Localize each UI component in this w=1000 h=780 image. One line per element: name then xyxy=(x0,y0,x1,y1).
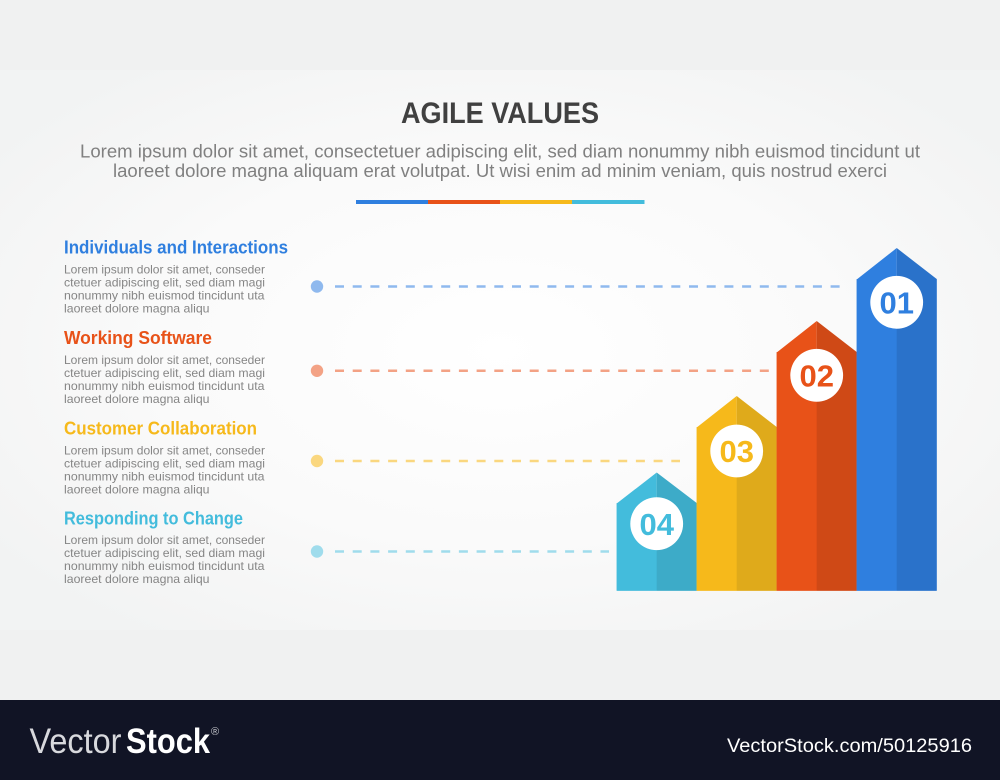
description: working software: Lorem ipsum dolor sit amet, conseder xyxy=(64,353,265,367)
connector: blue dot and dashed line xyxy=(311,280,840,293)
connector: orange dot and dashed line xyxy=(311,365,769,377)
footer bar xyxy=(0,700,1000,780)
description: individuals and interactions: ctetuer adipiscing elit, sed diam magi xyxy=(64,276,265,290)
description: working software xyxy=(64,353,265,406)
description: customer collaboration: ctetuer adipiscing elit, sed diam magi xyxy=(64,456,265,470)
title: AGILE VALUES xyxy=(401,97,599,130)
heading: working software: Working Software xyxy=(64,328,212,348)
description: responding to change: nonummy nibh euismod tincidunt uta xyxy=(64,559,265,573)
footer logo: Vector xyxy=(30,722,122,761)
connector: cyan dot and dashed line xyxy=(311,545,609,558)
arrow bar 04 xyxy=(617,472,697,591)
footer logo: ® xyxy=(211,726,219,738)
panel: individuals and interactions text xyxy=(64,238,288,316)
description: customer collaboration xyxy=(64,444,265,496)
description: customer collaboration: nonummy nibh euismod tincidunt uta xyxy=(64,470,265,484)
arrow bar 01: 01 xyxy=(879,285,914,320)
panel: working software text xyxy=(64,328,265,406)
footer image id: VectorStock.com/50125916 xyxy=(727,736,972,757)
panel: responding to change text xyxy=(64,508,265,586)
footer logo xyxy=(30,722,219,761)
description: working software: nonummy nibh euismod tincidunt uta xyxy=(64,379,265,393)
description: responding to change: Lorem ipsum dolor sit amet, conseder xyxy=(64,533,265,547)
subtitle text block: Lorem ipsum dolor sit amet, consectetuer adipiscing elit, sed diam nonummy nibh euismod tincidunt ut xyxy=(80,142,920,162)
connector: yellow dot and dashed line xyxy=(311,455,680,467)
description: working software: laoreet dolore magna aliqu xyxy=(64,392,210,406)
arrow bar 01 xyxy=(857,248,937,591)
heading: customer collaboration: Customer Collaboration xyxy=(64,418,257,438)
heading: individuals and interactions: Individuals and Interactions xyxy=(64,238,288,258)
description: responding to change: ctetuer adipiscing elit, sed diam magi xyxy=(64,546,265,560)
arrow bar 04: 04 xyxy=(639,507,675,542)
arrow bar 03 xyxy=(697,396,777,591)
subtitle text block xyxy=(80,142,920,181)
description: responding to change: laoreet dolore magna aliqu xyxy=(64,572,210,586)
description: customer collaboration: laoreet dolore magna aliqu xyxy=(64,482,210,496)
subtitle text block: laoreet dolore magna aliquam erat volutpat. Ut wisi enim ad minim veniam, quis nostrud exerci xyxy=(113,161,887,181)
description: individuals and interactions: laoreet dolore magna aliqu xyxy=(64,302,210,316)
description: individuals and interactions: nonummy nibh euismod tincidunt uta xyxy=(64,288,265,302)
description: working software: ctetuer adipiscing elit, sed diam magi xyxy=(64,366,265,380)
description: individuals and interactions xyxy=(64,262,265,316)
colored title divider xyxy=(356,200,644,204)
footer logo: Stock xyxy=(126,722,210,761)
arrow bar 02 xyxy=(777,321,857,591)
description: responding to change xyxy=(64,533,265,586)
description: customer collaboration: Lorem ipsum dolor sit amet, conseder xyxy=(64,444,265,458)
heading: responding to change: Responding to Change xyxy=(64,508,243,528)
arrow bar 02: 02 xyxy=(799,358,834,393)
panel: customer collaboration text xyxy=(64,418,265,496)
arrow bar 03: 03 xyxy=(719,434,754,469)
description: individuals and interactions: Lorem ipsum dolor sit amet, conseder xyxy=(64,262,265,276)
